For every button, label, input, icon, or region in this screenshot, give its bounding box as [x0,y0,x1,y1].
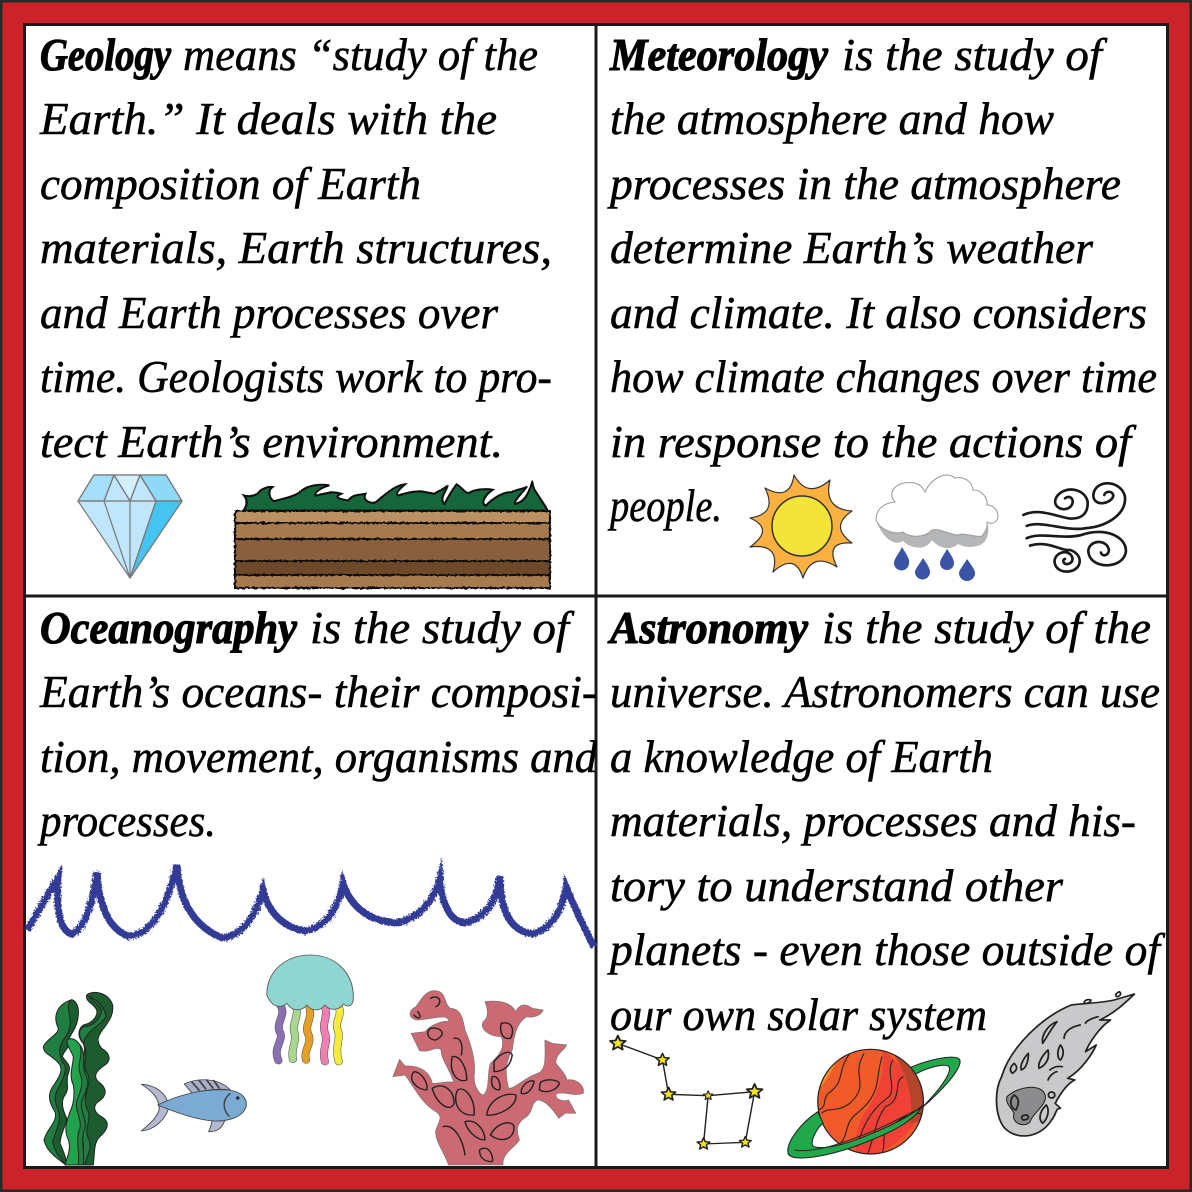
icon: seaweed [43,992,113,1165]
text block: geology description: tect Earth’s environment. [40,416,503,467]
text block: astronomy description: is the study of the [822,602,1151,653]
text block: astronomy description: tory to understand other [610,860,1064,911]
text block: oceanography description: Earth’s oceans- their composi- [39,666,597,717]
text block: astronomy description [607,602,1166,1040]
text block: meteorology description [607,29,1157,531]
text block: geology description: means “study of the [183,29,538,80]
panel: astronomy [607,602,1166,1158]
text block: geology description: time. Geologists work to pro- [40,351,552,402]
text block: meteorology description: and climate. It also considers [610,287,1147,338]
icon: soil layers with grass [235,482,550,588]
text block: geology description: and Earth processes over [40,287,499,338]
icon: comet [996,992,1134,1136]
icon: constellation [610,1036,762,1149]
text block: geology description [39,29,552,467]
text block: astronomy description: universe. Astronomers can use [610,666,1160,717]
panel: meteorology [607,29,1157,581]
text block: meteorology description: in response to the actions of [610,416,1137,467]
text block: oceanography description: processes. [37,795,216,846]
text block: oceanography description: is the study of [310,602,575,653]
text block: meteorology description: the atmosphere and how [610,93,1054,144]
panel: oceanography [27,602,598,1165]
waves [27,865,594,947]
icon: sun [750,475,852,578]
text block: astronomy description: planets - even those outside of [607,924,1166,975]
rain drops [894,547,975,581]
text block: astronomy description: our own solar system [610,989,987,1040]
icon: jellyfish [267,955,353,1062]
text block: geology description: materials, Earth structures, [40,222,552,273]
heading: Meteorology: Meteorology [609,29,829,80]
text block: oceanography description [37,602,598,846]
heading: Oceanography: Oceanography [40,602,298,653]
icon: wind swirls [1023,483,1126,572]
icon: coral [393,991,583,1165]
text block: meteorology description: determine Earth’s weather [610,222,1094,273]
text block: geology description: Earth.” It deals with the [39,93,497,144]
text block: meteorology description: people. [607,480,722,531]
icon: fish [141,1079,246,1132]
text block: geology description: composition of Earth [40,158,421,209]
text block: meteorology description: processes in the atmosphere [607,158,1121,209]
text block: meteorology description: how climate changes over time [610,351,1157,402]
text block: meteorology description: is the study of [842,29,1108,80]
text block: astronomy description: materials, processes and his- [610,795,1136,846]
icon: ringed planet [788,1048,960,1158]
icon: rain cloud [876,475,998,581]
icon: diamond [78,475,182,578]
heading: Geology: Geology [40,29,171,80]
panel: geology [39,29,552,588]
heading: Astronomy: Astronomy [607,602,809,653]
text block: oceanography description: tion, movement, organisms and [40,731,598,782]
text block: astronomy description: a knowledge of Earth [610,731,993,782]
